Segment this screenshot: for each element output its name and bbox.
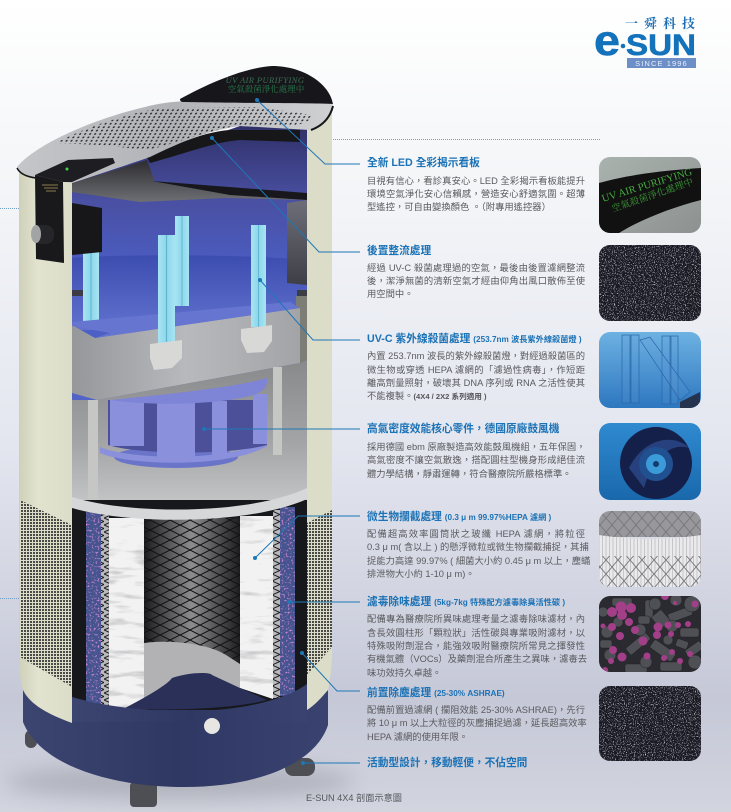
dotted guide lines [0,140,600,598]
thumbnail: fan [599,423,701,500]
text: LED display: 型遙控，可自由變換顏色 。（附專用遙控器） [367,202,551,212]
rear baffle [72,160,307,202]
leader lines [204,100,360,763]
top perforated plate [17,100,333,183]
floor shadow [5,764,355,800]
E-SUN logo: SINCE 1996 [635,59,688,68]
E-SUN logo: e [594,17,620,65]
navy base [23,660,328,787]
front lamps [158,225,266,345]
text: rear flow straightening [367,244,585,299]
LED sign: UV AIR PURIFYING [226,75,304,85]
right side panel [287,200,307,285]
text: LED display: 環境空氣淨化安心信賴感，營造安心舒適氛圍。超薄 [367,189,585,199]
right wall [307,105,332,710]
leader dots [202,98,305,765]
lower chamber [72,360,307,500]
E-SUN logo [594,13,701,68]
thumbnail: activated carbon [598,592,704,673]
right lower shaded strip [296,296,307,366]
text: microbe HEPA: 配備超高效率圓筒狀之玻纖 HEPA 濾網，將粒徑 [367,529,585,539]
thumbnail: rear foam [599,245,701,321]
lower interior dark [72,495,307,710]
caption: E-SUN 4X4 剖面示意圖 [306,793,402,803]
text: pre-filter: 將 10 μ m 以上大粒徑的灰塵捕捉過濾，延長超高效率 [367,718,587,728]
black foam [146,130,300,163]
text: core fan: 高氣密度不讓空氣散逸，搭配圓柱型機身形成絕佳流 [367,455,585,465]
text: carbon deodorising: 味功效持久卓越。 [367,668,441,678]
LED sign [180,66,333,104]
text: rear flow straightening: 後，潔淨無菌的清新空氣才經由仰角出風口散佈至使 [367,276,585,286]
text: pre-filter [367,686,587,742]
thumbnail: LED sign: 空氣殺菌淨化處理中 [609,174,695,215]
text: microbe HEPA: 0.3 μ m( 含以上 ) 的懸浮微粒或微生物攔截捕捉，其捕 [367,542,589,552]
thumbnail: LED sign: UV AIR PURIFYING [601,167,694,205]
base top curve overlay [72,684,307,722]
inner base disc [125,673,267,710]
text: rear flow straightening: 後置整流處理 [367,245,431,257]
text: carbon deodorising: 有機氣體（VOCs）及藥劑混合所產生之異味，濾毒去 [367,654,587,664]
text: mobility: 活動型設計，移動輕便，不佔空間 [367,757,527,769]
thumbnail: HEPA [599,511,701,587]
text: UV-C germicidal: 離高劑量照射，破壞其 DNA 序列或 RNA 之活性使其 [367,378,585,388]
text: core fan: 體力學結構，靜肅運轉，符合醫療院所嚴格標準。 [367,469,572,479]
text: microbe HEPA: 排泄物大小約 1-10 μ m)。 [367,569,475,579]
internal box [72,203,102,255]
text: LED display [367,156,585,212]
text: carbon deodorising [367,596,587,678]
text: LED display: 目視有信心，看診真安心。LED 全彩揭示看板能提升 [367,176,585,186]
filter stack [86,507,295,710]
control panel [31,158,115,263]
steel bracket [72,308,300,400]
thumbnail: LED sign [599,157,701,233]
text: rear flow straightening: 用空間中。 [367,289,414,299]
perforated panels [20,500,332,687]
text: microbe HEPA: 微生物攔截處理 (0.3 μ m 99.97%HEPA 濾網 ) [367,511,551,523]
white divider plate [72,488,307,520]
text: rear flow straightening: 經過 UV-C 殺菌處理過的空氣，最後由後置濾網整流 [367,263,585,273]
text: UV-C germicidal: UV-C 紫外線殺菌處理 (253.7nm 波長紫外線殺菌燈 ) [367,333,582,345]
base button [204,718,220,734]
pleats [101,510,280,708]
air purifier cutaway illustration [5,66,360,807]
inner mesh core [144,518,240,668]
LED sign: 空氣殺菌淨化處理中 [228,83,304,95]
text: carbon deodorising: 濾毒除味處理 (5kg-7kg 特殊配方濾毒除臭活性碳 ) [367,596,565,608]
HEPA [109,516,273,708]
text: core fan: 採用德國 ebm 原廠製造高效能鼓風機組，五年保固， [367,442,586,452]
text: carbon deodorising: 特殊吸附劑混合，能強效吸附醫療院所常見之揮發性 [367,641,585,651]
text: microbe HEPA: 捉能力高達 99.97% ( 細菌大小約 0.45 μ m 以上，塵蟎 [367,556,590,566]
inner cup [144,642,240,698]
UV lamps [83,216,189,322]
blue floor plate [72,255,307,330]
text: LED display: 全新 LED 全彩揭示看板 [367,157,480,169]
thumbnail: UV-C tubes [599,332,701,408]
E-SUN logo: SUN [626,29,696,62]
left wall [19,170,72,723]
text: carbon deodorising: 配備專為醫療院所異味處理考量之濾毒除味濾材，內 [367,614,585,624]
side brackets [72,290,307,297]
upper interior [72,126,307,500]
wheels [25,730,315,807]
text: UV-C germicidal: 不能複製。(4X4 / 2X2 系列適用 ) [367,391,487,401]
text: UV-C germicidal [367,332,585,401]
carbon layers [86,507,295,704]
text: core fan [367,422,586,479]
E-SUN logo: 一舜科技 [625,13,701,32]
text: carbon deodorising: 含長效圓柱形「顆粒狀」活性碳與專業吸附濾材，以 [367,628,585,638]
text: UV-C germicidal: 內置 253.7nm 波長的紫外線殺菌燈，對經過殺菌區的 [367,351,585,361]
thumbnail: pre-filter [599,686,701,761]
text: pre-filter: 配備前置過濾網 ( 攔阻效能 25-30% ASHRAE)，先行 [367,705,585,715]
text: core fan: 高氣密度效能核心零件，德國原廠鼓風機 [367,423,559,435]
lamp sockets [150,325,272,370]
support rods [88,367,282,500]
text: UV-C germicidal: 微生物或穿透 HEPA 濾網的「濾過性病毒」，作短距 [367,365,585,375]
centrifugal fan [100,378,267,468]
text: pre-filter: 前置除塵處理 (25-30% ASHRAE) [367,687,505,699]
text: pre-filter: HEPA 濾網的使用年限。 [367,732,468,742]
text: microbe HEPA [367,510,590,579]
